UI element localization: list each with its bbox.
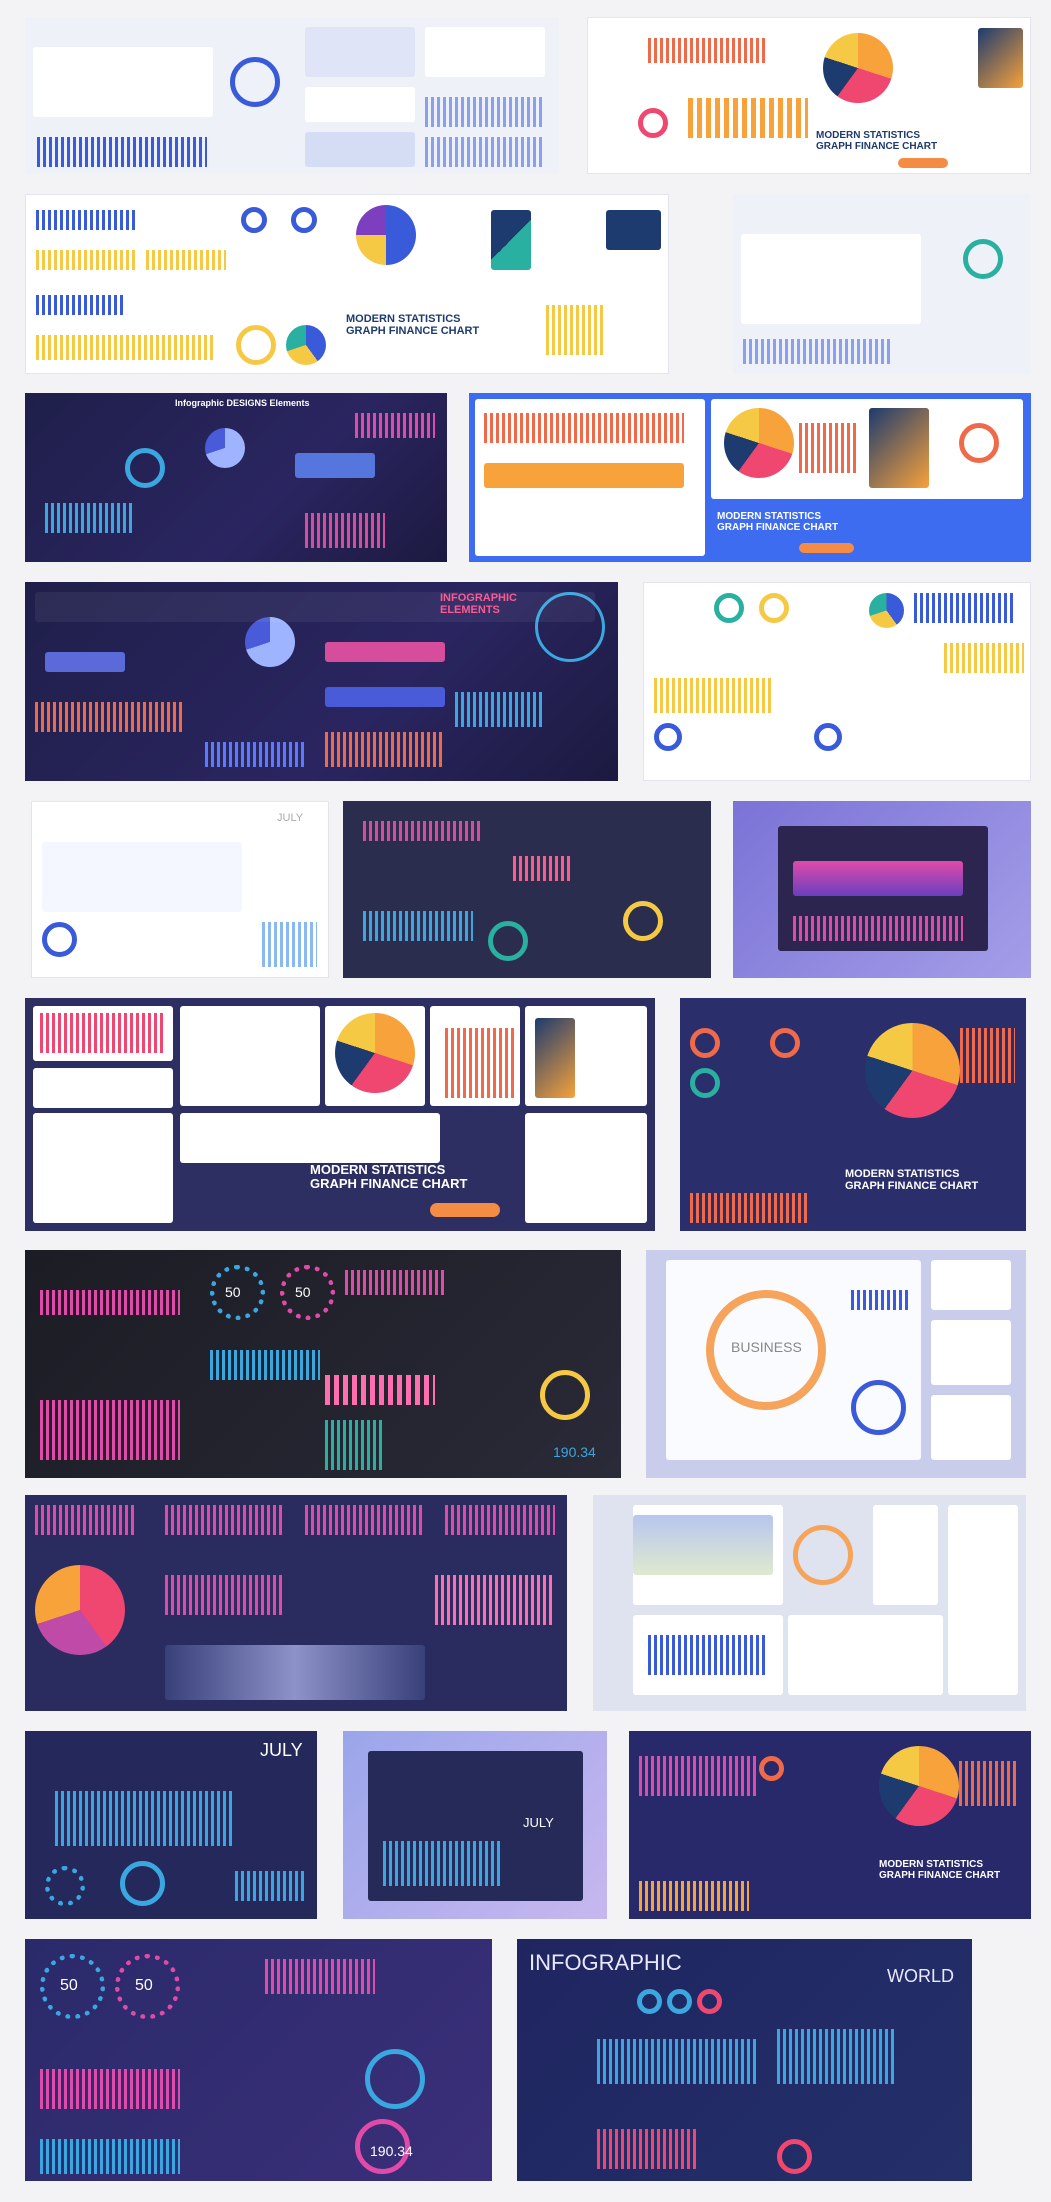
thumbnail: navy dashboard modern statistics: GRAPH FINANCE CHART bbox=[879, 1870, 1000, 1881]
thumbnail: white line dashboard row5 bbox=[31, 801, 329, 978]
thumbnail: navy pie dashboard bbox=[25, 1495, 567, 1711]
thumbnail: lavender BUSINESS: BUSINESS bbox=[731, 1339, 802, 1355]
thumbnail: modern statistics row1 right bbox=[587, 17, 1031, 174]
thumbnail: light dashboard row1 left bbox=[25, 17, 559, 174]
title text: MODERN STATISTICS bbox=[816, 130, 920, 141]
thumbnail: dark gradient designs elements: 190.34 bbox=[553, 1444, 596, 1460]
thumbnail: navy JULY dashboard: JULY bbox=[260, 1740, 303, 1760]
thumbnail: purple 3D chart bbox=[733, 801, 1031, 978]
thumbnail: white stats row2 left bbox=[25, 194, 669, 374]
thumbnail: dark Infographic DESIGNS Elements: Infographic DESIGNS Elements bbox=[175, 398, 310, 408]
thumbnail: INFOGRAPHIC WORLD: INFOGRAPHIC bbox=[529, 1950, 682, 1975]
thumbnail: light purple board bbox=[343, 1731, 607, 1919]
thumbnail: dark gradient designs elements: 50 bbox=[225, 1284, 241, 1300]
thumbnail: light line chart row2 right bbox=[733, 194, 1031, 374]
thumbnail: white line dashboard row5: JULY bbox=[277, 812, 303, 824]
title text bbox=[816, 130, 937, 152]
thumbnail: navy designs elements large: 190.34 bbox=[370, 2143, 413, 2159]
thumbnail: white stats row2 left: GRAPH FINANCE CHART bbox=[346, 325, 479, 337]
thumbnail: INFOGRAPHIC WORLD: WORLD bbox=[887, 1966, 954, 1986]
thumbnail: dark blue modern statistics: MODERN STATISTICS bbox=[845, 1168, 959, 1180]
thumbnail: modern statistics white panels on navy: MODERN STATISTICS bbox=[310, 1162, 445, 1177]
thumbnail: dark INFOGRAPHIC ELEMENTS: INFOGRAPHIC bbox=[440, 592, 517, 604]
thumbnail: dark Infographic Elements bbox=[343, 801, 711, 978]
thumbnail: INFOGRAPHIC WORLD bbox=[517, 1939, 972, 2181]
thumbnail: blue border modern statistics: MODERN STATISTICS bbox=[717, 511, 821, 522]
thumbnail: dark gradient designs elements: 50 bbox=[295, 1284, 311, 1300]
thumbnail: white colorful charts bbox=[643, 582, 1031, 781]
thumbnail: light BUSINESS dashboard bbox=[593, 1495, 1026, 1711]
thumbnail: dark Infographic DESIGNS Elements bbox=[25, 393, 447, 562]
thumbnail: white stats row2 left: MODERN STATISTICS bbox=[346, 313, 460, 325]
thumbnail: navy designs elements large: 50 bbox=[60, 1977, 78, 1994]
thumbnail: dark INFOGRAPHIC ELEMENTS: ELEMENTS bbox=[440, 604, 500, 616]
thumbnail: lavender BUSINESS bbox=[646, 1250, 1026, 1478]
thumbnail: navy dashboard modern statistics bbox=[629, 1731, 1031, 1919]
thumbnail: modern statistics white panels on navy: GRAPH FINANCE CHART bbox=[310, 1176, 467, 1191]
thumbnail: navy designs elements large bbox=[25, 1939, 492, 2181]
title text: GRAPH FINANCE CHART bbox=[816, 141, 937, 152]
thumbnail: dark INFOGRAPHIC ELEMENTS bbox=[25, 582, 618, 781]
thumbnail: navy designs elements large: 50 bbox=[135, 1977, 153, 1994]
thumbnail: blue border modern statistics bbox=[469, 393, 1031, 562]
thumbnail: modern statistics white panels on navy bbox=[25, 998, 655, 1231]
thumbnail: blue border modern statistics: GRAPH FINANCE CHART bbox=[717, 522, 838, 533]
thumbnail: dark gradient designs elements bbox=[25, 1250, 621, 1478]
thumbnail: light purple board: JULY bbox=[523, 1815, 554, 1830]
thumbnail: navy JULY dashboard bbox=[25, 1731, 317, 1919]
thumbnail: dark blue modern statistics: GRAPH FINANCE CHART bbox=[845, 1180, 978, 1192]
thumbnail: dark blue modern statistics bbox=[680, 998, 1026, 1231]
panel: line charts bbox=[33, 47, 213, 117]
thumbnail: navy dashboard modern statistics: MODERN STATISTICS bbox=[879, 1859, 983, 1870]
